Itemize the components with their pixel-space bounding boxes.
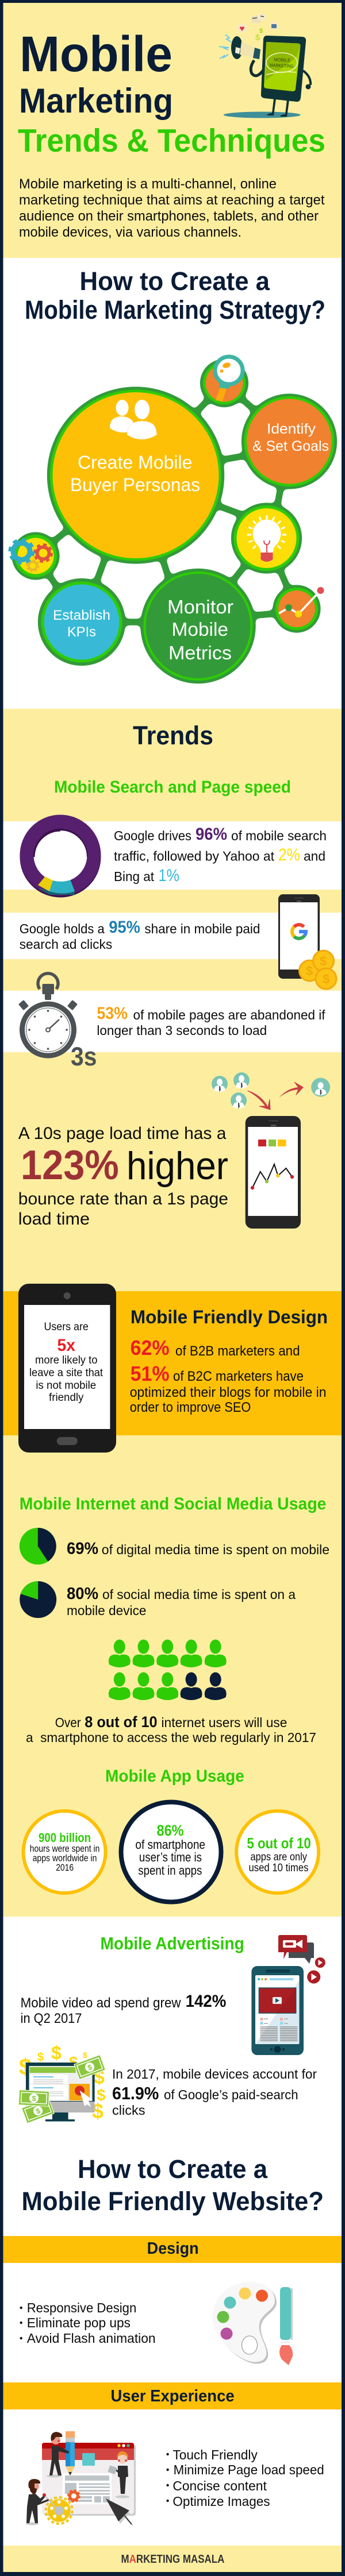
circle stat: 86 percent: spent in apps — [138, 1863, 202, 1878]
intro paragraph: Mobile marketing is a multi-channel, online — [19, 176, 277, 192]
list: user experience tips: Optimize Images — [172, 2494, 270, 2509]
title: Trends & Techniques — [18, 122, 325, 159]
subheading: mobile app usage: Mobile App Usage — [105, 1767, 244, 1786]
panel: mobile friendly design: 51% — [131, 1362, 170, 1385]
icon: monitor with money: $ — [37, 2051, 44, 2064]
illustration: phone with megaphone: MARKETING — [270, 63, 294, 69]
panel: mobile friendly design: Mobile Friendly Design — [131, 1307, 328, 1327]
stat: 61.9 percent: 61.9% — [112, 2083, 159, 2103]
stat: google 96 percent: Google drives — [114, 828, 191, 843]
list: design tips: Eliminate pop ups — [27, 2315, 131, 2330]
icon: stopwatch — [18, 974, 97, 1071]
title — [18, 26, 325, 159]
intro paragraph: marketing technique that aims at reaching a target — [19, 192, 325, 208]
stat: google 95 percent: search ad clicks — [20, 937, 112, 952]
bubble: monitor mobile metrics: Metrics — [168, 642, 232, 663]
stat: 8 out of 10: 8 out of 10 — [85, 1713, 158, 1731]
panel: mobile friendly design — [130, 1307, 328, 1415]
pictogram: 8 of 10 people — [109, 1639, 227, 1700]
stat: 123 percent bounce rate: load time — [18, 1210, 90, 1229]
subheading: mobile search and page speed: Mobile Search and Page speed — [54, 778, 291, 797]
icon: phone with google and coins — [278, 894, 336, 989]
intro paragraph — [19, 176, 325, 240]
icon: monitor with money: $ — [97, 2086, 106, 2104]
stat: 80 percent: mobile device — [67, 1603, 146, 1618]
stat: 142 percent: Mobile video ad spend grew — [21, 1995, 181, 2011]
pie chart: 69 percent — [20, 1528, 56, 1565]
icon: users moving through phone — [212, 1072, 330, 1229]
stat: 8 out of 10: a smartphone to access the web regularly in 2017 — [26, 1730, 316, 1745]
donut chart — [26, 821, 94, 895]
bubble: magnifier — [203, 357, 246, 404]
panel: mobile friendly design: 62% — [131, 1336, 170, 1360]
icon: phone with google and coins: $ — [323, 972, 329, 986]
stat: 53 percent: of mobile pages are abandoned if — [133, 1007, 325, 1022]
icon: paint palette and brush — [213, 2282, 293, 2365]
stat: 123 percent bounce rate — [18, 1124, 228, 1229]
list: user experience tips: Touch Friendly — [172, 2447, 258, 2462]
icon: monitor with money — [18, 2042, 106, 2123]
phone: users are 5x: friendly — [49, 1392, 84, 1404]
stat: google 96 percent: Bing at — [114, 869, 155, 884]
bubble: identify and set goals — [244, 396, 335, 486]
stat: 53 percent: longer than 3 seconds to load — [97, 1023, 267, 1038]
heading: strategy: How to Create a — [79, 267, 270, 296]
stat: google 96 percent: 96% — [195, 825, 227, 844]
circle stat: 5 out of 10: 5 out of 10 — [247, 1835, 311, 1852]
illustration: team building a website — [26, 2431, 136, 2525]
stat: 69 percent: of digital media time is spent on mobile — [102, 1542, 329, 1557]
title: Marketing — [19, 82, 173, 120]
bubble: create buyer personas — [50, 389, 221, 561]
stat: google 96 percent: and — [304, 849, 325, 864]
heading: mobile friendly website: How to Create a — [78, 2154, 268, 2184]
panel: mobile friendly design: of B2B marketers and — [175, 1343, 300, 1359]
icon: monitor with money: $ — [34, 2106, 42, 2116]
stat: 61.9 percent — [112, 2067, 317, 2118]
bubble: establish KPIs: KPIs — [67, 624, 96, 640]
stat: google 95 percent: share in mobile paid — [144, 921, 260, 936]
circle stat: 900 billion: apps worldwide in — [33, 1853, 97, 1864]
icon: monitor with money: $ — [86, 2063, 94, 2072]
list: design tips: Avoid Flash animation — [27, 2331, 156, 2346]
icon: tablet with video ad — [251, 1966, 304, 2055]
stat: 8 out of 10 — [26, 1713, 316, 1745]
circle stat: 5 out of 10 — [236, 1811, 319, 1893]
panel: mobile friendly design: order to improve SEO — [130, 1400, 251, 1415]
circle stat: 86 percent: user’s time is — [139, 1850, 202, 1864]
stat: 123 percent bounce rate: bounce rate than a 1s page — [18, 1189, 228, 1208]
circle stat: 900 billion: 900 billion — [39, 1830, 91, 1845]
list: design tips — [20, 2300, 156, 2346]
circle stat: 900 billion: hours were spent in — [30, 1844, 99, 1854]
circle stat: 5 out of 10: used 10 times — [248, 1861, 309, 1874]
phone: users are 5x: is not mobile — [36, 1380, 96, 1392]
stat: google 96 percent: traffic, followed by Yahoo at — [114, 849, 275, 864]
panel: mobile friendly design: of B2C marketers have — [173, 1369, 304, 1384]
subheading: mobile internet and social media usage: Mobile Internet and Social Media Usage — [20, 1494, 326, 1513]
stat: 142 percent: 142% — [186, 1992, 226, 2011]
stat: 123 percent bounce rate: higher — [126, 1144, 228, 1188]
stat: 8 out of 10: internet users will use — [161, 1715, 287, 1730]
circle stat: 900 billion: 2016 — [56, 1863, 74, 1873]
icon: stopwatch: 3s — [71, 1042, 97, 1071]
footer logo: MARKETING MASALA — [121, 2553, 224, 2566]
stat: 8 out of 10: Over — [55, 1715, 81, 1730]
band heading: user experience: User Experience — [110, 2387, 235, 2405]
bubble: identify and set goals: & Set Goals — [252, 438, 329, 454]
bubble: light bulb — [233, 505, 299, 571]
stat: 142 percent: in Q2 2017 — [21, 2011, 82, 2026]
stat: 123 percent bounce rate: 123% — [21, 1142, 119, 1188]
icon: phone with google and coins: $ — [320, 954, 327, 968]
stat: google 96 percent: 2% — [278, 845, 300, 864]
stat: google 95 percent — [20, 918, 260, 952]
phone: users are 5x — [18, 1284, 116, 1453]
phone: users are 5x: more likely to — [35, 1354, 98, 1366]
heading: mobile friendly website: Mobile Friendly Website? — [22, 2187, 324, 2216]
icon: monitor with money: $ — [69, 2053, 78, 2071]
stat: 80 percent — [67, 1585, 296, 1618]
list: user experience tips: Minimize Page load speed — [174, 2462, 324, 2477]
bubble: identify and set goals: Identify — [267, 421, 316, 437]
intro paragraph: audience on their smartphones, tablets, and other — [19, 208, 319, 224]
circle stat: 86 percent: 86% — [156, 1822, 184, 1839]
circle stat: 900 billion — [23, 1811, 106, 1893]
icon: monitor with money: $ — [32, 2094, 37, 2103]
bubble: chart — [275, 587, 324, 630]
bubble: establish KPIs: Establish — [53, 608, 110, 623]
bubble: create buyer personas: Create Mobile — [78, 452, 192, 473]
band heading: design: Design — [147, 2239, 199, 2258]
bubble: create buyer personas: Buyer Personas — [70, 474, 200, 495]
illustration: phone with megaphone: $ — [255, 33, 260, 43]
stat: 61.9 percent: clicks — [112, 2103, 145, 2118]
phone: users are 5x: 5x — [57, 1336, 75, 1355]
icon: monitor with money: $ — [94, 2067, 105, 2088]
bubble: monitor mobile metrics: Monitor — [167, 596, 233, 617]
illustration: phone with megaphone: MOBILE — [274, 57, 290, 63]
heading: mobile friendly website — [22, 2154, 324, 2216]
title: Mobile — [20, 26, 172, 82]
icon: monitor with money: $ — [51, 2042, 62, 2063]
stat: 61.9 percent: In 2017, mobile devices account for — [112, 2067, 317, 2081]
icon: monitor with money: $ — [83, 2050, 87, 2060]
icon: monitor with money: $ — [19, 2054, 32, 2080]
illustration: phone with megaphone: $ — [259, 28, 263, 34]
bubble: establish KPIs — [41, 581, 122, 663]
bubble: monitor mobile metrics: Mobile — [171, 619, 228, 640]
phone: users are 5x: leave a site that — [29, 1367, 103, 1379]
heading: trends: Trends — [133, 721, 213, 750]
stat: 53 percent — [97, 1004, 325, 1038]
bubble diagram — [10, 357, 337, 683]
list: user experience tips: Concise content — [172, 2478, 267, 2493]
subheading: mobile advertising: Mobile Advertising — [100, 1933, 244, 1953]
stat: 123 percent bounce rate: A 10s page load time has a — [18, 1124, 227, 1143]
stat: google 95 percent: Google holds a — [20, 921, 105, 936]
icon: video bubbles — [278, 1935, 325, 1984]
stat: google 96 percent: of mobile search — [231, 828, 327, 843]
stat: 61.9 percent: of Google’s paid-search — [164, 2087, 298, 2102]
stat: google 96 percent — [114, 825, 327, 885]
circle stat: 86 percent — [121, 1802, 221, 1902]
illustration: phone with megaphone — [219, 14, 310, 118]
stat: google 96 percent: 1% — [159, 866, 179, 885]
stat: 53 percent: 53% — [97, 1004, 128, 1023]
stat: google 95 percent: 95% — [109, 918, 140, 937]
icon: phone with google and coins: $ — [306, 964, 313, 978]
pie chart: 80 percent — [20, 1581, 56, 1618]
list: design tips: Responsive Design — [27, 2300, 136, 2315]
phone: users are 5x: Users are — [44, 1321, 89, 1333]
intro paragraph: mobile devices, via various channels. — [19, 225, 241, 240]
heading: strategy — [25, 267, 325, 325]
bubble: monitor mobile metrics — [144, 571, 253, 681]
stat: 80 percent: of social media time is spent on a — [102, 1587, 296, 1602]
circle stat: 86 percent: of smartphone — [135, 1837, 205, 1852]
bubble: gears — [10, 535, 57, 577]
stat: 80 percent: 80% — [67, 1585, 98, 1603]
stat: 69 percent: 69% — [67, 1539, 98, 1558]
list: user experience tips — [166, 2447, 324, 2509]
panel: mobile friendly design: optimized their blogs for mobile in — [130, 1385, 327, 1400]
stat: 142 percent — [21, 1992, 226, 2026]
circle stat: 5 out of 10: apps are only — [251, 1851, 307, 1863]
icon: monitor with money: $ — [92, 2099, 103, 2123]
